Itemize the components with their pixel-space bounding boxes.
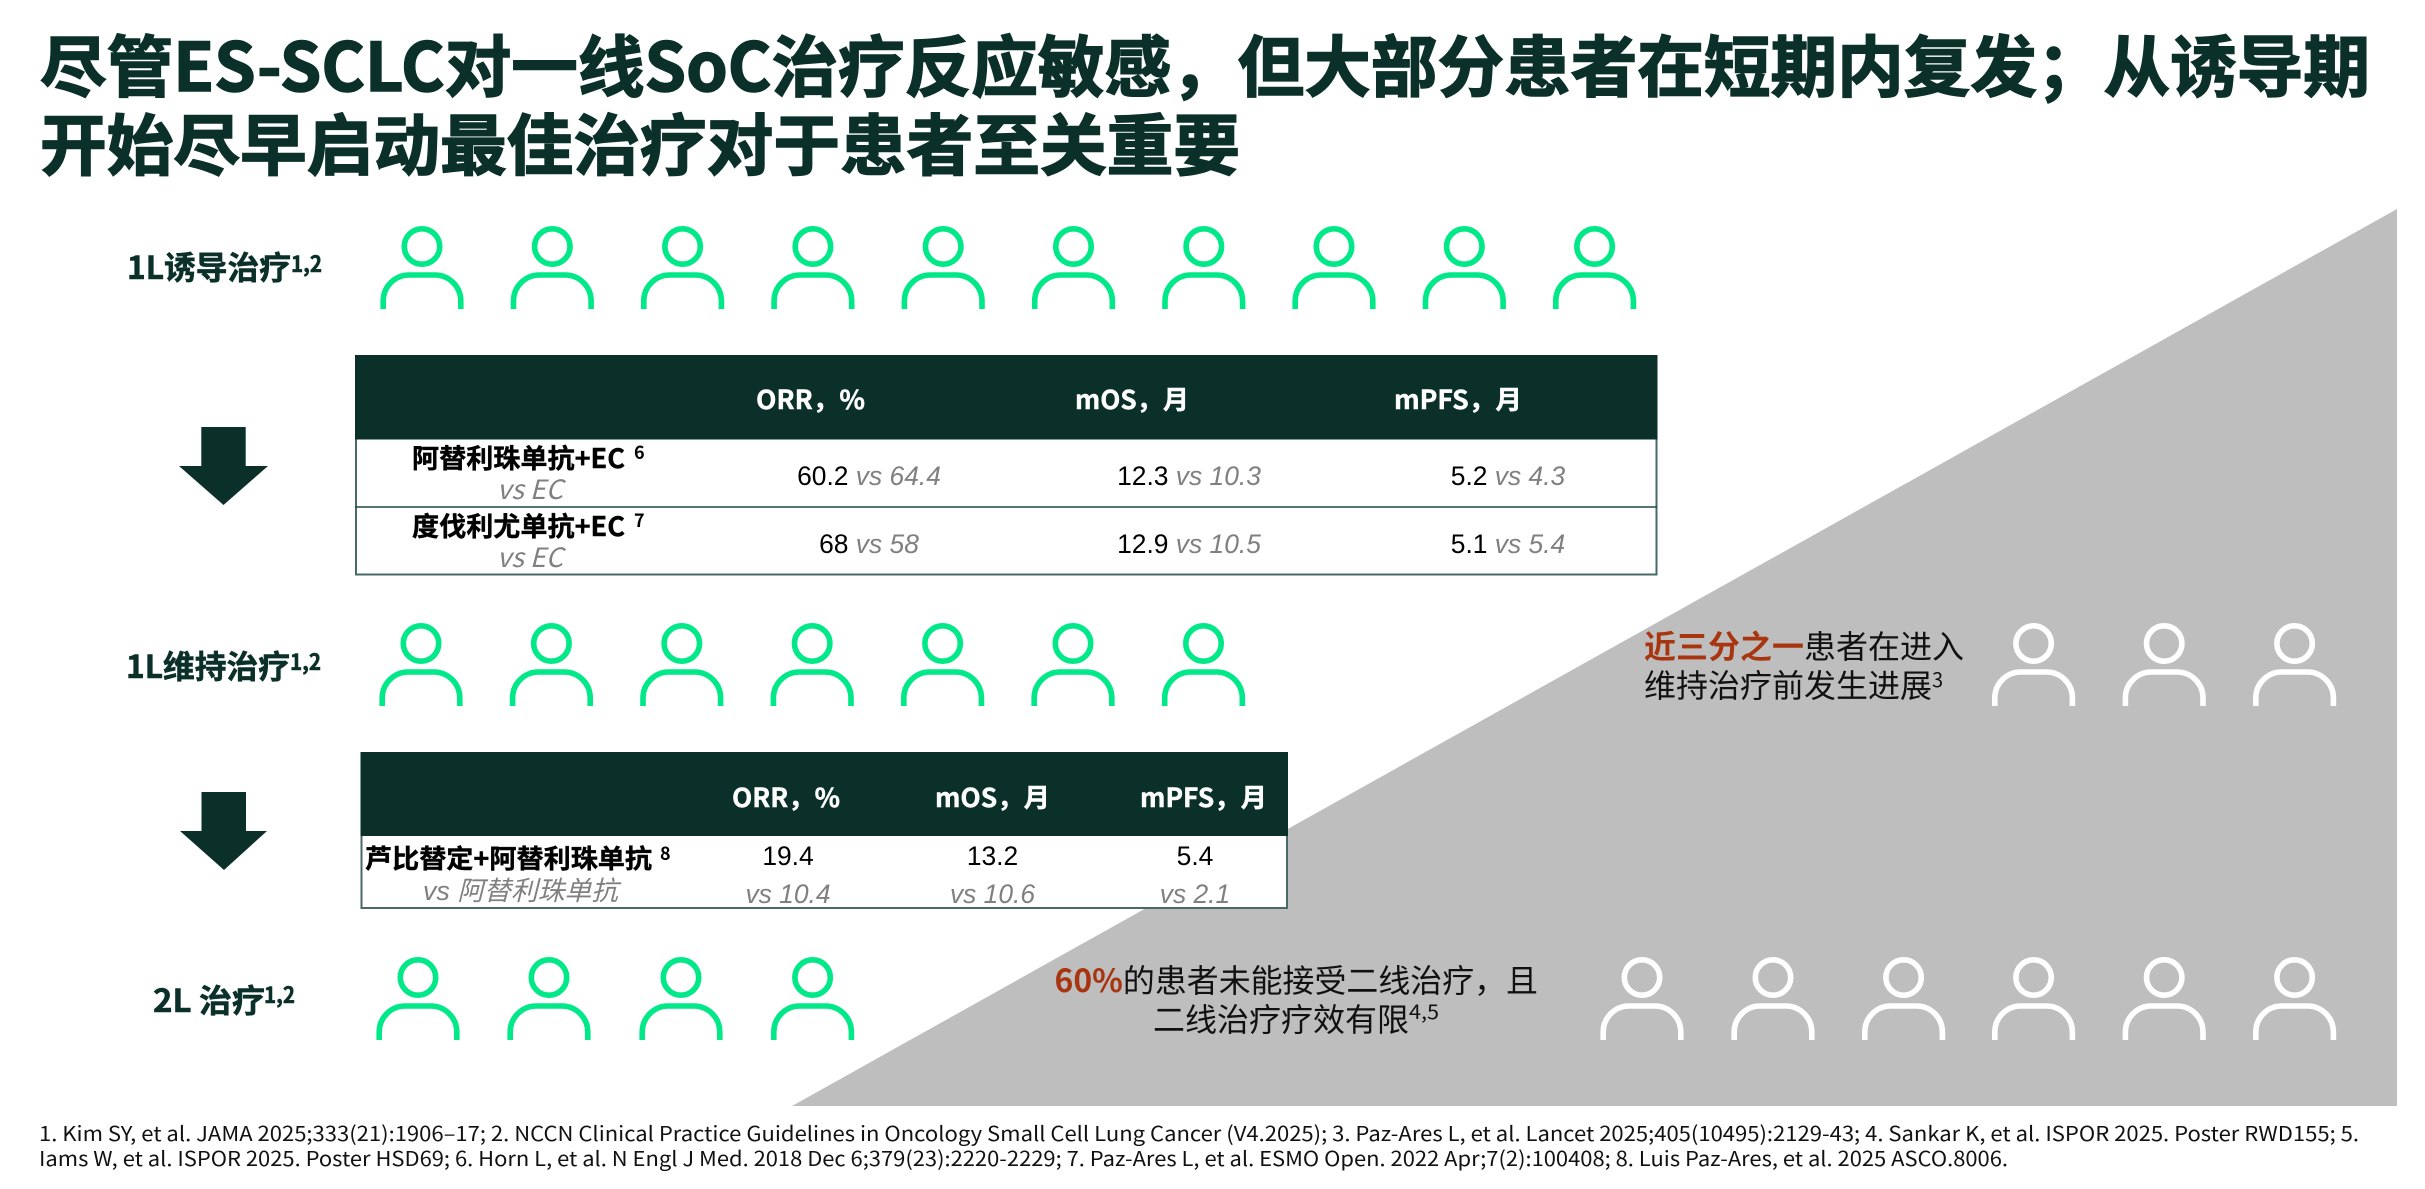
icons: patients not receiving 2L (6) — [1603, 960, 2333, 1040]
title: 尽管ES-SCLC对一线SoC治疗反应敏感，但大部分患者在短期内复发；从诱导期 — [40, 15, 2370, 111]
table 1 row: durvalumab: vs EC — [497, 536, 566, 575]
table 2 header: mPFS，月 — [1140, 778, 1267, 815]
footnote references — [39, 1117, 2359, 1172]
label: 1L maintenance: 1,2 — [290, 645, 321, 677]
table 1 row: atezolizumab: 12.3 vs 10.3 — [1117, 461, 1261, 491]
table 2 row: lurbinectedin + atezolizumab: vs 10.6 — [950, 879, 1035, 909]
table 2 header: ORR，% — [732, 778, 840, 815]
title — [40, 15, 2370, 190]
table 2 row: lurbinectedin + atezolizumab: 8 — [660, 840, 671, 866]
table 1 header: mOS，月 — [1075, 380, 1189, 417]
icons: patients lost before maintenance (3) — [1995, 626, 2333, 706]
table 1 header: mPFS，月 — [1394, 380, 1522, 417]
title: 开始尽早启动最佳治疗对于患者至关重要 — [40, 94, 1240, 190]
table 1 row: atezolizumab: 5.2 vs 4.3 — [1451, 461, 1566, 491]
table: 1L maintenance results — [360, 752, 1288, 909]
table: 1L induction results — [355, 355, 1658, 575]
arrow: induction to maintenance — [179, 427, 268, 505]
table 2 row: lurbinectedin + atezolizumab: vs 10.4 — [745, 879, 831, 909]
table 1 row: durvalumab: 度伐利尤单抗+EC — [412, 505, 625, 544]
callout: patients not receiving 2L: 4,5 — [1409, 996, 1439, 1025]
table 1 row: durvalumab: 7 — [634, 507, 645, 533]
table 2 header — [732, 778, 1267, 815]
table 1 row: atezolizumab — [412, 437, 1566, 507]
callout: patients not receiving 2L: 60%的患者未能接受二线治疗，且 — [1054, 956, 1538, 1002]
table 1 row: durvalumab — [412, 505, 1565, 575]
table 2 row: lurbinectedin + atezolizumab: 芦比替定+阿替利珠单抗 — [365, 839, 652, 876]
table 2 row: lurbinectedin + atezolizumab — [365, 839, 1230, 909]
callout: progression before maintenance: 3 — [1932, 664, 1943, 693]
table 1 row: durvalumab: 12.9 vs 10.5 — [1117, 529, 1261, 559]
label: 1L induction: 1L诱导治疗 — [127, 243, 291, 289]
table 2 row: lurbinectedin + atezolizumab: vs 阿替利珠单抗 — [423, 876, 622, 906]
table 1 header — [756, 380, 1522, 417]
table 1 row: durvalumab: 5.1 vs 5.4 — [1451, 529, 1565, 559]
table 1 row: atezolizumab: 60.2 vs 64.4 — [797, 461, 941, 491]
table 2 row: lurbinectedin + atezolizumab: 19.4 — [762, 841, 814, 871]
label: 2L therapy: 2L 治疗 — [153, 976, 265, 1022]
callout: progression before maintenance: 维持治疗前发生进展 — [1644, 661, 1932, 707]
callout: progression before maintenance — [1644, 622, 1964, 707]
footnote references: 1. Kim SY, et al. JAMA 2025;333(21):1906–17; 2. NCCN Clinical Practice Guidelines in Oncology Small Cell Lung Cancer (V4.2025); 3. Paz-Ares L, et al. Lancet 2025;405(10495):2129-43; 4. Sankar K, et al. ISPOR 2025. Poster RWD155; 5. — [39, 1117, 2359, 1147]
table 1 header: ORR，% — [756, 380, 865, 417]
table 1 row: durvalumab: 68 vs 58 — [819, 529, 919, 559]
gray triangle background — [792, 209, 2397, 1106]
callout: patients not receiving 2L — [1054, 956, 1538, 1041]
arrow: maintenance to 2L — [180, 792, 267, 870]
callout: progression before maintenance: 近三分之一患者在进入 — [1644, 622, 1964, 668]
footnote references: Iams W, et al. ISPOR 2025. Poster HSD69; 6. Horn L, et al. N Engl J Med. 2018 Dec 6;379(23):2220-2229; 7. Paz-Ares L, et al. ESMO Open. 2022 Apr;7(2):100408; 8. Luis Paz-Ares, et al. 2025 ASCO.8006. — [39, 1142, 2008, 1172]
table 1 row: atezolizumab: vs EC — [497, 468, 566, 507]
label: 1L induction: 1,2 — [291, 247, 322, 279]
icons: 1L induction patients (10) — [383, 229, 1633, 309]
callout: patients not receiving 2L: 二线治疗疗效有限 — [1153, 995, 1409, 1041]
table 2 row: lurbinectedin + atezolizumab: vs 2.1 — [1160, 879, 1230, 909]
table 2 row: lurbinectedin + atezolizumab: 13.2 — [967, 841, 1018, 871]
icons: 1L maintenance patients (7) — [382, 626, 1242, 706]
table 1 row: atezolizumab: 6 — [634, 439, 645, 465]
icons: 2L patients (4) — [379, 960, 851, 1040]
label: 1L maintenance: 1L维持治疗 — [126, 642, 290, 688]
table 2 row: lurbinectedin + atezolizumab: 5.4 — [1177, 841, 1213, 871]
table 1 row: atezolizumab: 阿替利珠单抗+EC — [412, 437, 625, 476]
label: 2L therapy: 1,2 — [264, 978, 295, 1010]
table 2 header: mOS，月 — [935, 778, 1050, 815]
